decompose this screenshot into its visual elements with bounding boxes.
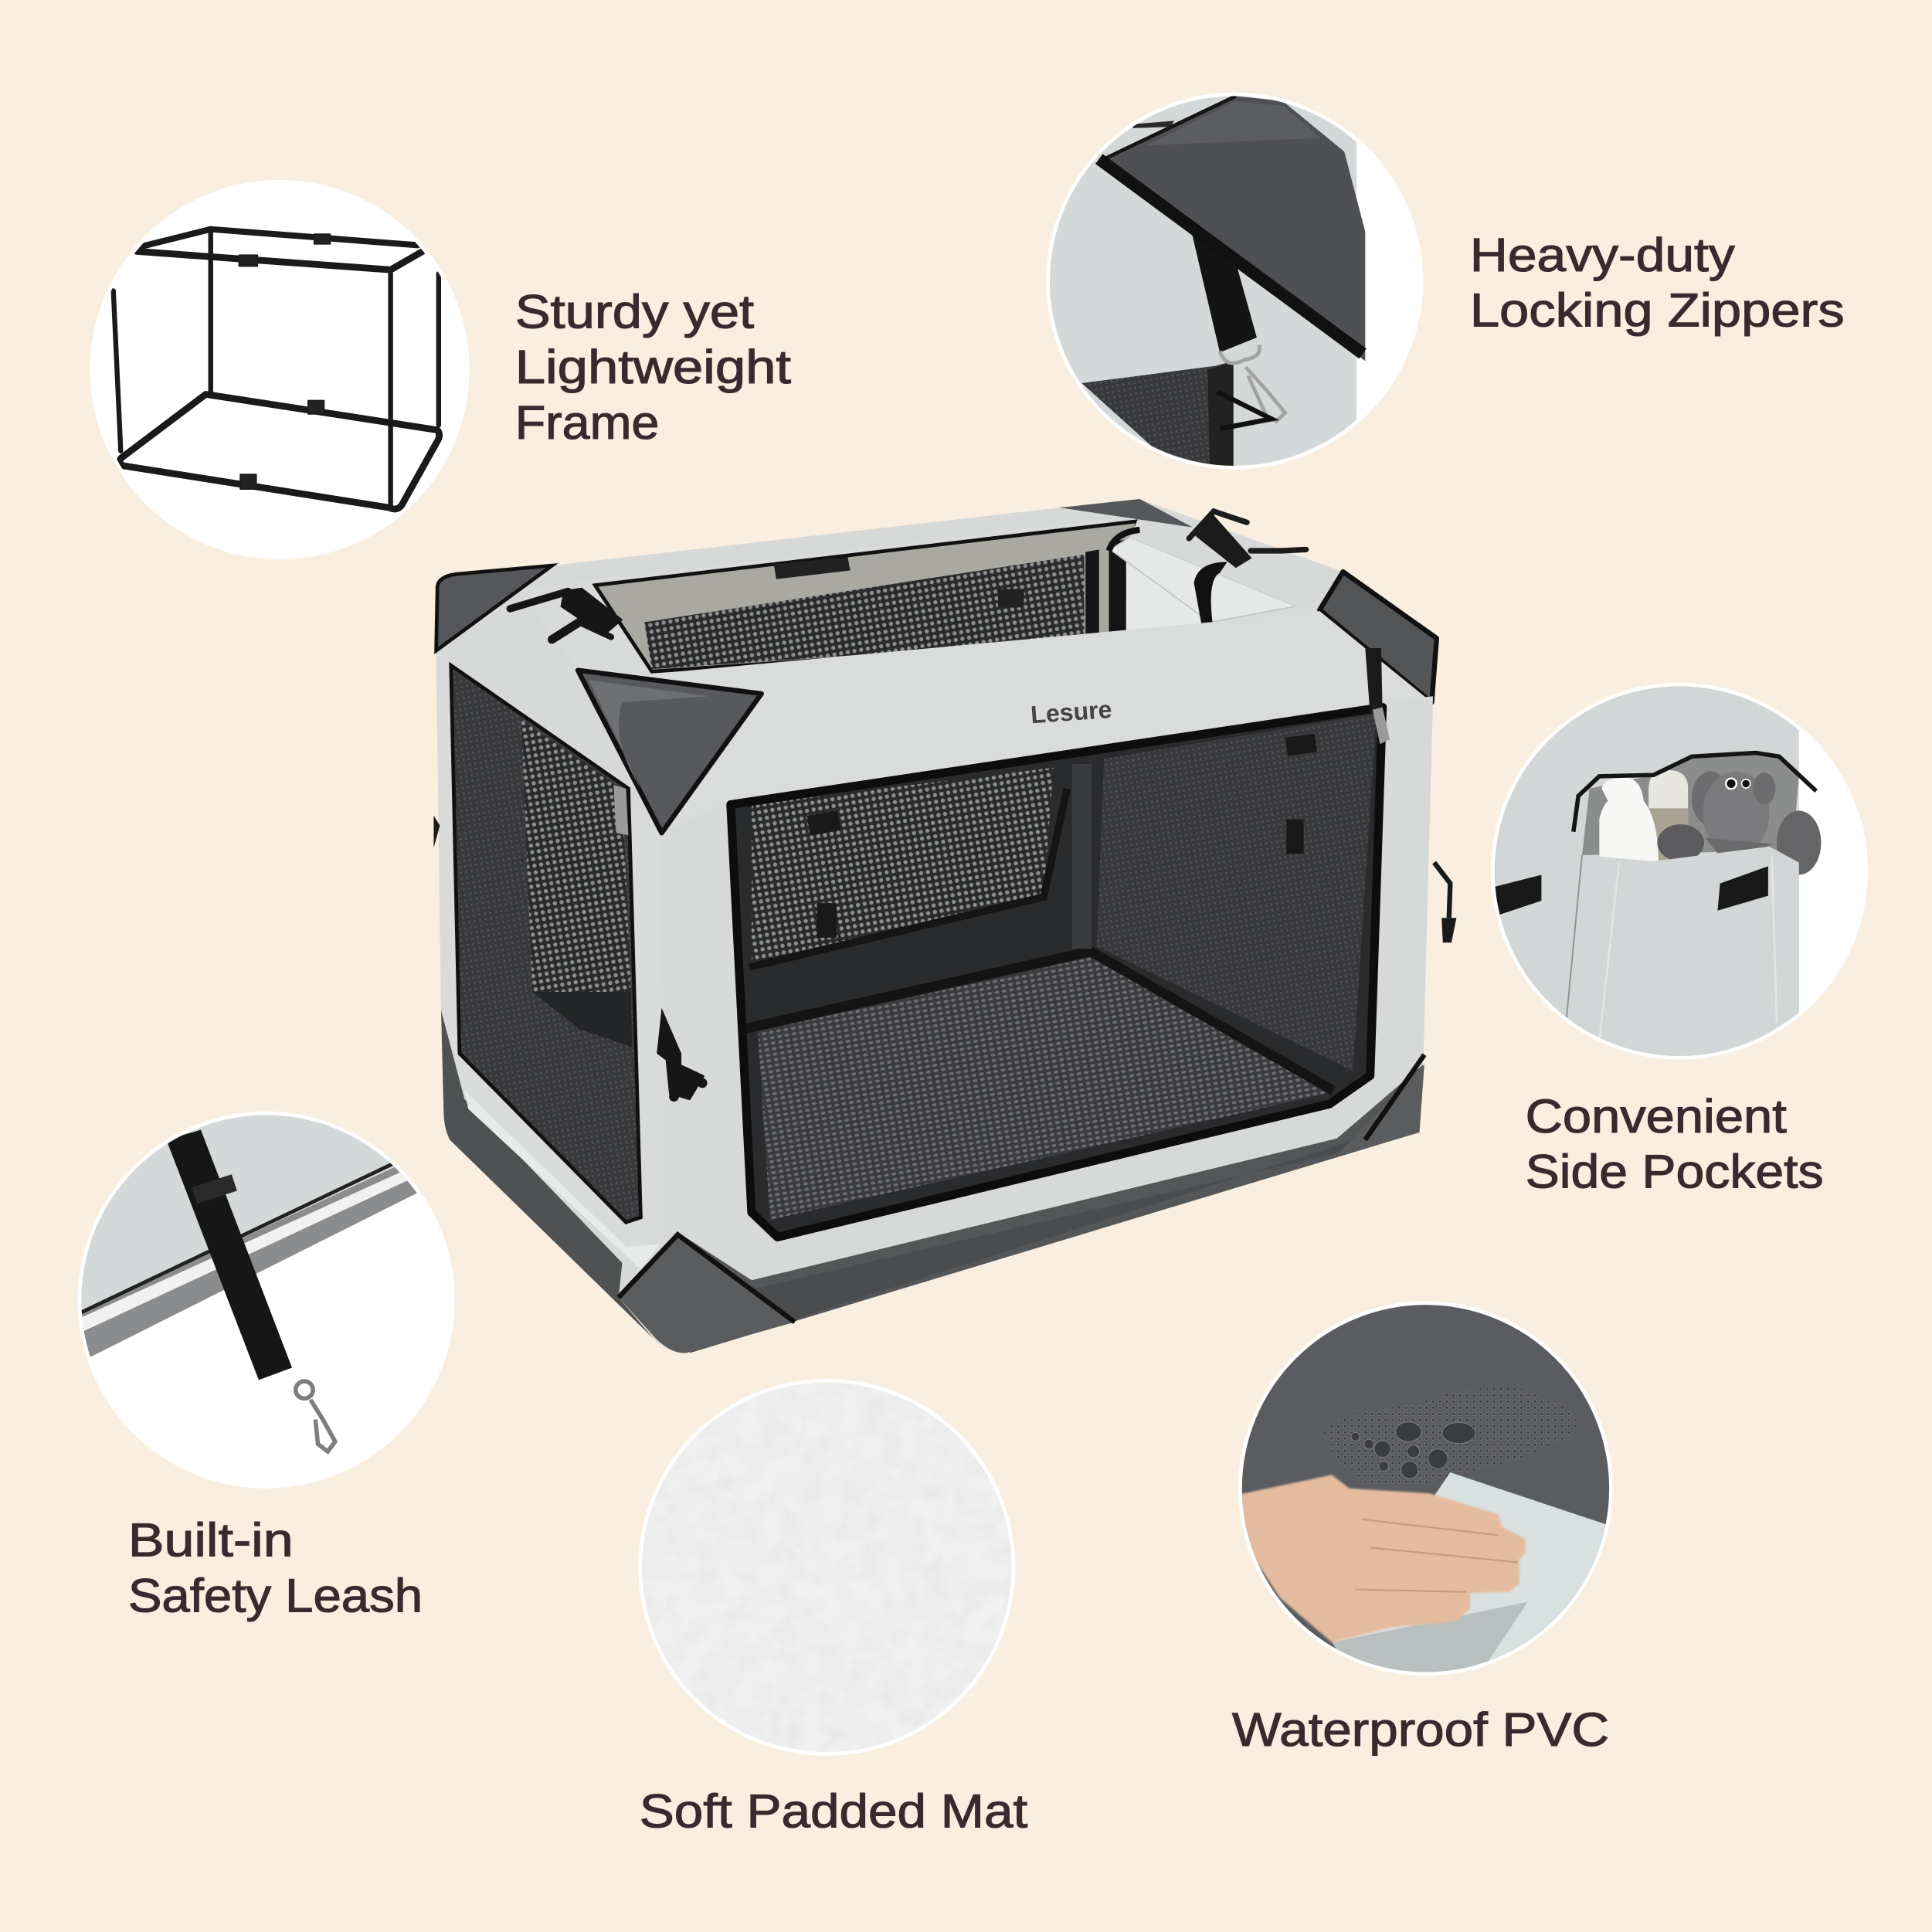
icon: metal frame xyxy=(114,229,440,509)
leash clasp xyxy=(296,1381,335,1452)
top opening xyxy=(595,521,1214,671)
base front xyxy=(677,1064,1423,1353)
heading: mat label: Soft Padded Mat xyxy=(640,1784,1027,1838)
heading: zippers label xyxy=(1470,229,1845,338)
reflective edge band xyxy=(74,1164,425,1365)
left side panel xyxy=(436,650,665,1269)
panel: waterproof PVC circle xyxy=(1238,1301,1617,1678)
panel: safety leash circle xyxy=(74,1109,455,1489)
water droplets xyxy=(1323,1388,1581,1485)
panel: locking zippers circle xyxy=(1046,93,1423,474)
panel: pet crate product xyxy=(433,499,1456,1353)
back corner caps xyxy=(436,499,1437,702)
top face xyxy=(518,515,1319,674)
front top corner cap xyxy=(578,671,762,833)
heading: leash label: Built-in xyxy=(128,1514,294,1567)
front panel top band xyxy=(578,611,1431,833)
heading: frame label: Sturdy yet xyxy=(515,285,754,338)
wipe cloth xyxy=(1332,1472,1617,1678)
panel: side pockets circle xyxy=(1489,683,1868,1066)
base left xyxy=(441,1010,653,1338)
heading: frame label: Lightweight xyxy=(515,341,791,394)
right side zipper and clasp xyxy=(433,648,1456,942)
pocket opening xyxy=(1582,753,1799,855)
left top handle xyxy=(510,589,621,640)
crate body xyxy=(436,499,1437,1353)
leash strap xyxy=(166,1130,292,1380)
heading: frame label: Frame xyxy=(515,396,659,450)
heading: pockets label: Convenient xyxy=(1526,1090,1787,1143)
side buckle xyxy=(657,1008,708,1102)
heading: frame label xyxy=(515,285,791,450)
rolled door flap xyxy=(1109,511,1331,623)
front panel xyxy=(662,696,1433,1280)
zipper clasp xyxy=(1220,345,1285,421)
heading: zippers label: Locking Zippers xyxy=(1470,284,1845,338)
left side mesh xyxy=(451,665,640,1222)
fleece bed xyxy=(81,1115,395,1312)
dark corner flap xyxy=(1102,96,1365,361)
heading: leash label: Safety Leash xyxy=(128,1569,423,1622)
heading: PVC label: Waterproof PVC xyxy=(1232,1703,1609,1757)
straps xyxy=(1496,874,1542,915)
pocket body xyxy=(1567,847,1799,1066)
panel: soft padded mat circle xyxy=(638,1379,1015,1756)
heading: zippers label: Heavy-duty xyxy=(1470,229,1735,282)
brand logo: Lesure xyxy=(1030,695,1113,728)
heading: pockets label: Side Pockets xyxy=(1526,1146,1824,1199)
heading: leash label xyxy=(128,1514,423,1622)
front interior xyxy=(731,708,1383,1237)
dark mesh pocket xyxy=(1081,361,1234,474)
icon: hand xyxy=(1238,1475,1526,1642)
pocket contents xyxy=(1599,770,1821,874)
zipper strap xyxy=(1191,232,1257,352)
panel: sturdy frame circle xyxy=(90,180,470,559)
heading: pockets label xyxy=(1526,1090,1824,1199)
bottom corner caps xyxy=(619,1054,1424,1353)
